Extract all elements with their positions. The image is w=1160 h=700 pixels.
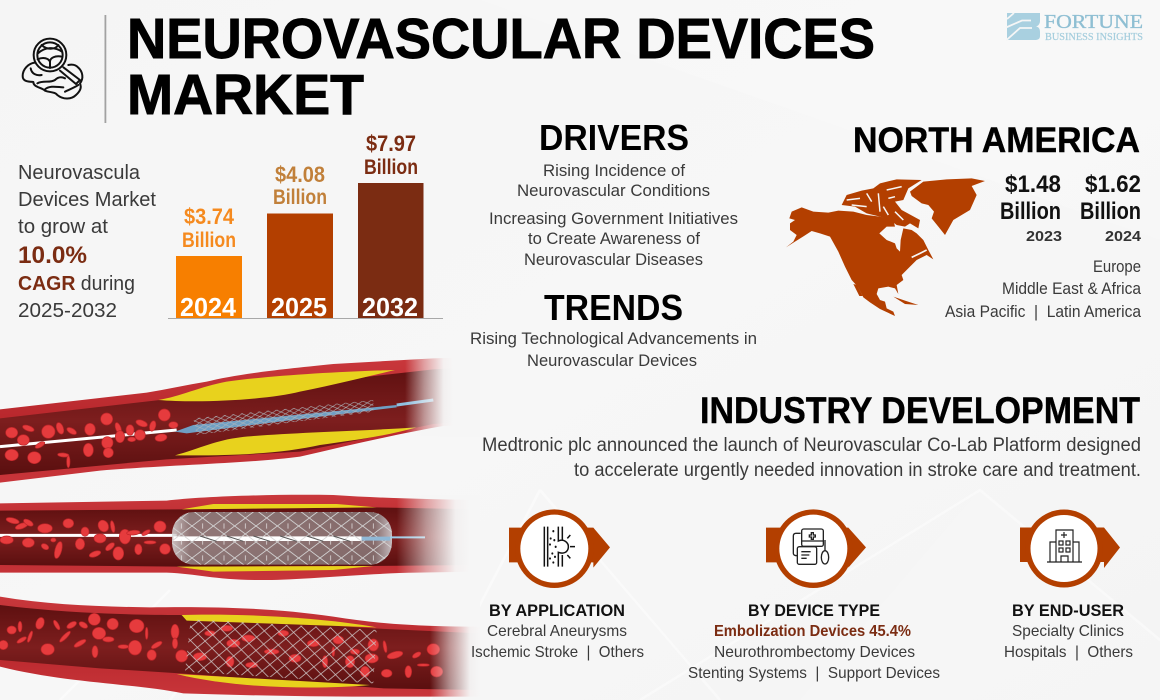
bar 2025: Billion (273, 186, 327, 209)
panel: trends: Rising Technological Advancements in (470, 330, 757, 348)
text block: application list (471, 623, 644, 661)
panel: drivers: Neurovascular Conditions (517, 182, 710, 200)
text block: CAGR: Neurovascula (18, 161, 141, 184)
panel: trends: Neurovascular Devices (527, 352, 697, 370)
illustration: artery stents (0, 350, 480, 700)
artery 2 (0, 495, 480, 582)
bar 2032: Billion (364, 156, 418, 179)
text block: application list: Cerebral Aneurysms (487, 623, 627, 640)
text block: CAGR: 2025-2032 (18, 299, 117, 322)
text block: end-user list (1004, 623, 1133, 661)
panel: by device type (688, 509, 940, 682)
text block: other regions: Middle East & Africa (1002, 280, 1142, 298)
heading: by application: BY APPLICATION (489, 601, 625, 620)
text block: industry development: Medtronic plc announced the launch of Neurovascular Co-Lab Platform designed (482, 435, 1141, 456)
text block: other regions: Europe (1093, 258, 1141, 276)
value 2024: 2024 (1105, 228, 1142, 245)
text block: device type list: Neurothrombectomy Devices (714, 644, 915, 661)
bar 2024: Billion (182, 229, 236, 252)
text block: device type list: Embolization Devices 45.4% (714, 623, 911, 640)
bar 2032 (358, 131, 424, 322)
icon: hospital (1020, 510, 1120, 588)
CAGR value: 10.0% (18, 242, 87, 269)
text block: CAGR (18, 161, 156, 322)
bar 2032: $7.97 (366, 131, 416, 156)
panel: by end-user (1004, 510, 1133, 661)
text block: other regions (945, 258, 1142, 321)
logo tagline: BUSINESS INSIGHTS (1045, 32, 1143, 43)
panel: drivers: to Create Awareness of (528, 230, 700, 248)
panel: drivers (489, 117, 738, 269)
icon: medical device (766, 509, 866, 588)
text block: application list: Ischemic Stroke | Others (471, 644, 644, 661)
title (127, 7, 875, 127)
text block: other regions: Asia Pacific | Latin America (945, 303, 1142, 321)
text block: industry development (482, 435, 1141, 481)
panel: by application (471, 509, 644, 661)
divider (104, 15, 106, 123)
text block: end-user list: Hospitals | Others (1004, 644, 1133, 661)
text block: CAGR: Devices Market (18, 188, 156, 211)
icon: FB mark (1006, 13, 1040, 40)
heading: by device type: BY DEVICE TYPE (748, 601, 880, 620)
bar 2024: $3.74 (184, 204, 235, 229)
text block: industry development: to accelerate urgently needed innovation in stroke care and treatment. (574, 460, 1141, 481)
title: NEUROVASCULAR DEVICES (127, 7, 875, 71)
title: MARKET (127, 63, 364, 127)
heading: by end-user: BY END-USER (1012, 601, 1124, 620)
value 2023: $1.48 (1005, 171, 1061, 198)
bar 2024 (176, 204, 242, 322)
icon: brain with magnifier (23, 39, 82, 98)
value 2023: Billion (1000, 198, 1061, 225)
CAGR label: CAGR during (18, 272, 135, 295)
bar 2025: $4.08 (275, 162, 325, 187)
bar 2025: 2025 (271, 294, 327, 322)
icon: artery aneurysm (509, 509, 610, 588)
panel: drivers: Rising Incidence of (543, 162, 685, 180)
logo: Fortune Business Insights (1006, 11, 1143, 43)
artery 3 (0, 592, 480, 700)
value 2024 (1080, 171, 1142, 245)
value 2023: 2023 (1026, 228, 1062, 245)
panel: drivers: Neurovascular Diseases (524, 251, 703, 269)
heading: north america: NORTH AMERICA (853, 121, 1140, 160)
value 2023 (1000, 171, 1062, 245)
text block: CAGR: to grow at (18, 215, 108, 238)
heading: drivers: DRIVERS (539, 117, 689, 158)
panel: regional values (1000, 171, 1142, 245)
bar 2025 (267, 162, 333, 322)
value 2024: $1.62 (1085, 171, 1141, 198)
bar chart (168, 131, 443, 322)
value 2024: Billion (1080, 198, 1141, 225)
heading: trends: TRENDS (544, 287, 683, 328)
map: north america (786, 178, 985, 316)
bar 2024: 2024 (180, 294, 237, 322)
logo wordmark: FORTUNE (1044, 11, 1143, 33)
text block: device type list: Stenting Systems | Support Devices (688, 665, 940, 682)
artery 1 (0, 350, 480, 483)
bar 2032: 2032 (362, 294, 418, 322)
text block: device type list (688, 623, 940, 682)
text block: end-user list: Specialty Clinics (1012, 623, 1124, 640)
panel: drivers: Increasing Government Initiatives (489, 210, 738, 228)
panel: trends (470, 287, 757, 370)
